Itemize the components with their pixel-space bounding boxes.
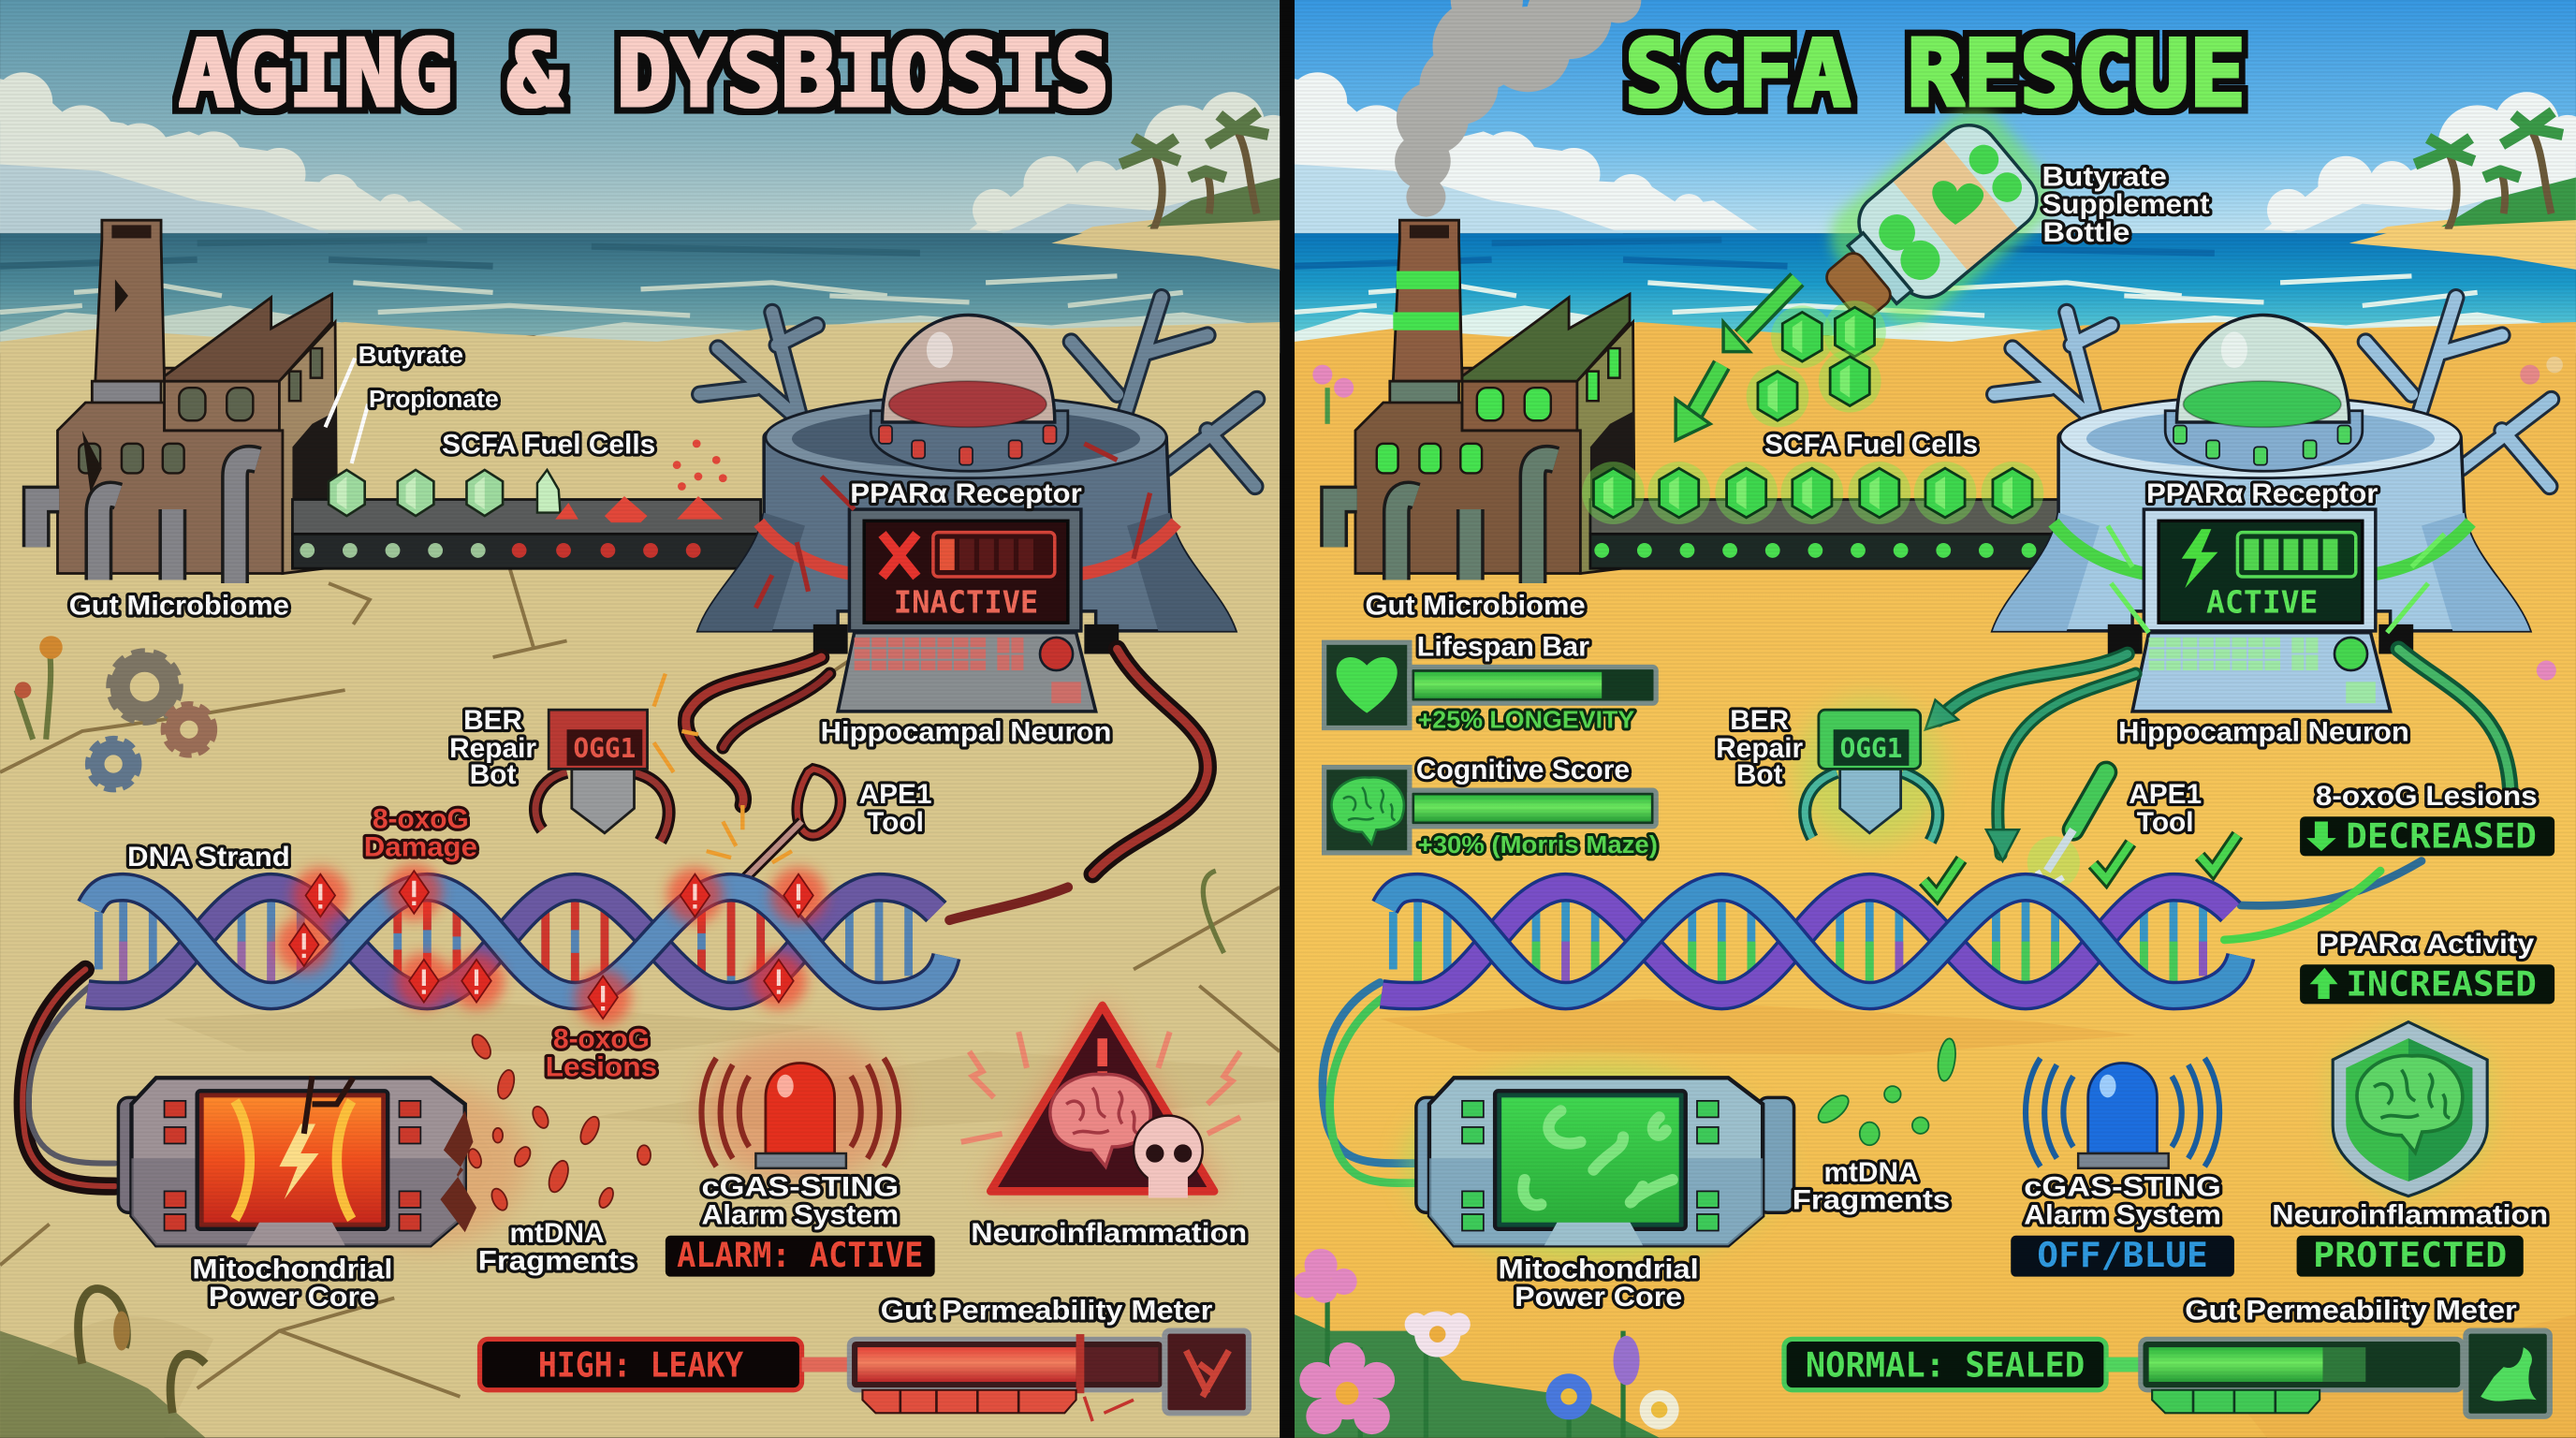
- status badge: off blue: OFF/BLUE: [2037, 1235, 2208, 1275]
- label: cgas-sting alarm system: Alarm System: [2024, 1199, 2221, 1230]
- label: gut microbiome: Gut Microbiome: [69, 590, 289, 621]
- status badge: alarm active: ALARM: ACTIVE: [677, 1235, 923, 1275]
- label: cgas-sting alarm system: [2024, 1172, 2221, 1230]
- label: 8-oxog lesions: [546, 1024, 657, 1083]
- label: 8-oxog lesions: Lesions: [546, 1052, 657, 1083]
- label: mitochondrial power core: Power Core: [209, 1282, 376, 1313]
- status badge: normal sealed: NORMAL: SEALED: [1806, 1345, 2085, 1386]
- cognitive score widget: [1325, 755, 1658, 858]
- label: mtdna fragments: mtDNA: [509, 1218, 605, 1249]
- label: ber repair bot: Repair: [449, 733, 536, 764]
- icon: cgas-sting red alarm: [701, 1035, 899, 1183]
- labels: butyrate, propionate: [326, 341, 499, 463]
- status badge: increased: INCREASED: [2346, 964, 2537, 1005]
- status: active: ACTIVE: [2206, 584, 2318, 621]
- arrowheads: [1925, 700, 2019, 861]
- falling fuel cells: [1747, 301, 1886, 427]
- gut microbiome factory: [37, 220, 337, 583]
- lifespan bar widget: [1325, 631, 1656, 733]
- right panel backdrop: [1288, 0, 2576, 1438]
- label: mitochondrial power core: [192, 1254, 393, 1313]
- label: ber repair bot: [449, 705, 536, 790]
- repair cables, frayed: [22, 649, 1208, 1186]
- label: ber repair bot: Bot: [1736, 759, 1783, 790]
- title: scfa rescue: SCFA RESCUE: [1625, 21, 2246, 127]
- label: ape1 tool: APE1: [2129, 779, 2202, 810]
- label: butyrate supplement bottle: Supplement: [2042, 189, 2210, 220]
- ape1 tool, wrench: [2027, 772, 2106, 888]
- mitochondrial power core, cracked: [118, 1077, 526, 1245]
- cognitive score widget: Cognitive Score: [1416, 755, 1630, 785]
- gut microbiome factory, healthy: [1334, 220, 1634, 583]
- mtdna fragments: [466, 1032, 651, 1212]
- label: ape1 tool: [859, 779, 932, 838]
- ber repair bot, damaged: [535, 674, 698, 842]
- status badge: high leaky: [480, 1339, 802, 1390]
- icon: broken gears: [15, 636, 213, 788]
- hippocampal neuron receptor machine, active: [1993, 298, 2552, 712]
- labels: butyrate, propionate: Butyrate: [359, 341, 463, 369]
- factory smoke plume: [1395, 0, 1641, 217]
- label: ber repair bot: Bot: [470, 759, 516, 790]
- label: 8-oxog lesions: 8-oxoG: [553, 1024, 650, 1055]
- label: cgas-sting alarm system: Alarm System: [701, 1199, 899, 1230]
- panel: aging and dysbiosis: [0, 0, 1296, 1438]
- check marks on repaired sites: [1924, 835, 2237, 895]
- label: mtdna fragments: Fragments: [478, 1246, 636, 1277]
- gut permeability meter gauge: [2106, 1331, 2550, 1416]
- label: butyrate supplement bottle: [2042, 161, 2210, 248]
- label: ber repair bot: [1716, 705, 1803, 790]
- label: neuroinflammation: Neuroinflammation: [2272, 1199, 2548, 1230]
- labels: butyrate, propionate: Propionate: [369, 385, 499, 413]
- status: inactive: INACTIVE: [894, 584, 1038, 621]
- lifespan bar widget: +25% LONGEVITY: [1418, 705, 1635, 733]
- label: mitochondrial power core: [1499, 1254, 1699, 1313]
- label: ape1 tool: Tool: [867, 807, 924, 838]
- icon: protected brain shield: [2333, 1022, 2489, 1196]
- label: gut microbiome: Gut Microbiome: [1365, 590, 1586, 621]
- label: hippocampal neuron: Hippocampal Neuron: [821, 717, 1111, 748]
- dna double helix, repaired: [1382, 888, 2241, 996]
- label: ppar activity: PPARα Activity: [2319, 929, 2535, 960]
- label: 8-oxog damage: 8-oxoG: [373, 804, 469, 835]
- wilted plants: [0, 871, 1224, 1438]
- ber repair bot, healthy: [1795, 698, 1943, 846]
- label: ber repair bot: BER: [1730, 705, 1789, 736]
- ape1 tool, cracked: [707, 769, 841, 879]
- lifespan bar widget: Lifespan Bar: [1417, 631, 1589, 662]
- label: cgas-sting alarm system: cGAS-STING: [2024, 1172, 2221, 1203]
- conveyor belt with fuel cells: [1582, 462, 2058, 568]
- label: scfa fuel cells: SCFA Fuel Cells: [1764, 429, 1978, 460]
- label: mtdna fragments: [478, 1218, 636, 1277]
- butyrate supplement bottle: [1798, 95, 2068, 353]
- label: ape1 tool: Tool: [2137, 807, 2194, 838]
- conveyor belt with decaying fuel cells: [292, 439, 761, 568]
- center divider: [1280, 0, 1295, 1438]
- label: ber repair bot: BER: [463, 705, 522, 736]
- bot screen text: OGG1: [574, 733, 636, 764]
- label: ape1 tool: APE1: [859, 779, 932, 810]
- gut permeability meter gauge: [802, 1331, 1249, 1421]
- label: hippocampal neuron: Hippocampal Neuron: [2118, 717, 2409, 748]
- title: aging and dysbiosis: AGING & DYSBIOSIS: [179, 21, 1109, 127]
- label: ppar alpha receptor: PPARα Receptor: [850, 478, 1082, 509]
- label: mitochondrial power core: Mitochondrial: [192, 1254, 393, 1284]
- label: mitochondrial power core: Power Core: [1515, 1282, 1682, 1313]
- label: ape1 tool: [2129, 779, 2202, 838]
- label: dna strand: DNA Strand: [127, 842, 290, 873]
- status badge: protected: PROTECTED: [2313, 1235, 2507, 1275]
- label: mtdna fragments: [1793, 1157, 1950, 1216]
- label: 8-oxog damage: Damage: [364, 831, 477, 862]
- icon: neuroinflammation warning triangle: [961, 999, 1240, 1197]
- arrows: fuel cells flow down: [1676, 279, 1797, 440]
- mtdna fragments, healthy: [1814, 1037, 1958, 1145]
- label: neuroinflammation: Neuroinflammation: [971, 1218, 1247, 1249]
- bot screen text: OGG1: [1840, 733, 1902, 764]
- status badge: decreased: DECREASED: [2346, 816, 2537, 857]
- label: mitochondrial power core: Mitochondrial: [1499, 1254, 1699, 1284]
- label: cgas-sting alarm system: [701, 1172, 899, 1230]
- label: scfa fuel cells: SCFA Fuel Cells: [442, 429, 655, 460]
- label: mtdna fragments: Fragments: [1793, 1185, 1950, 1216]
- label: 8-oxog lesions: 8-oxoG Lesions: [2316, 781, 2538, 812]
- status badge: high leaky: HIGH: LEAKY: [538, 1345, 744, 1386]
- repair cables, healthy with arrows: [1323, 649, 2510, 1183]
- hippocampal neuron receptor machine, inactive: [698, 298, 1257, 712]
- label: butyrate supplement bottle: Butyrate: [2042, 161, 2167, 192]
- label: ppar alpha receptor: PPARα Receptor: [2146, 478, 2378, 509]
- icon: cgas-sting blue alarm: [2026, 1058, 2219, 1168]
- flower meadow: [1293, 357, 2563, 1438]
- label: cgas-sting alarm system: cGAS-STING: [701, 1172, 899, 1203]
- left panel backdrop: [0, 0, 1296, 1438]
- dna double helix with lesions: [87, 864, 946, 1025]
- label: 8-oxog damage: [364, 804, 477, 862]
- label: gut permeability meter: Gut Permeability Meter: [2185, 1295, 2517, 1326]
- label: butyrate supplement bottle: Bottle: [2042, 217, 2130, 248]
- label: mtdna fragments: mtDNA: [1823, 1157, 1919, 1188]
- cognitive score widget: +30% (Morris Maze): [1418, 830, 1658, 858]
- mitochondrial power core, healthy: [1405, 1064, 1794, 1262]
- label: ber repair bot: Repair: [1716, 733, 1803, 764]
- panel: scfa rescue: [1288, 0, 2576, 1438]
- label: gut permeability meter: Gut Permeability Meter: [881, 1295, 1213, 1326]
